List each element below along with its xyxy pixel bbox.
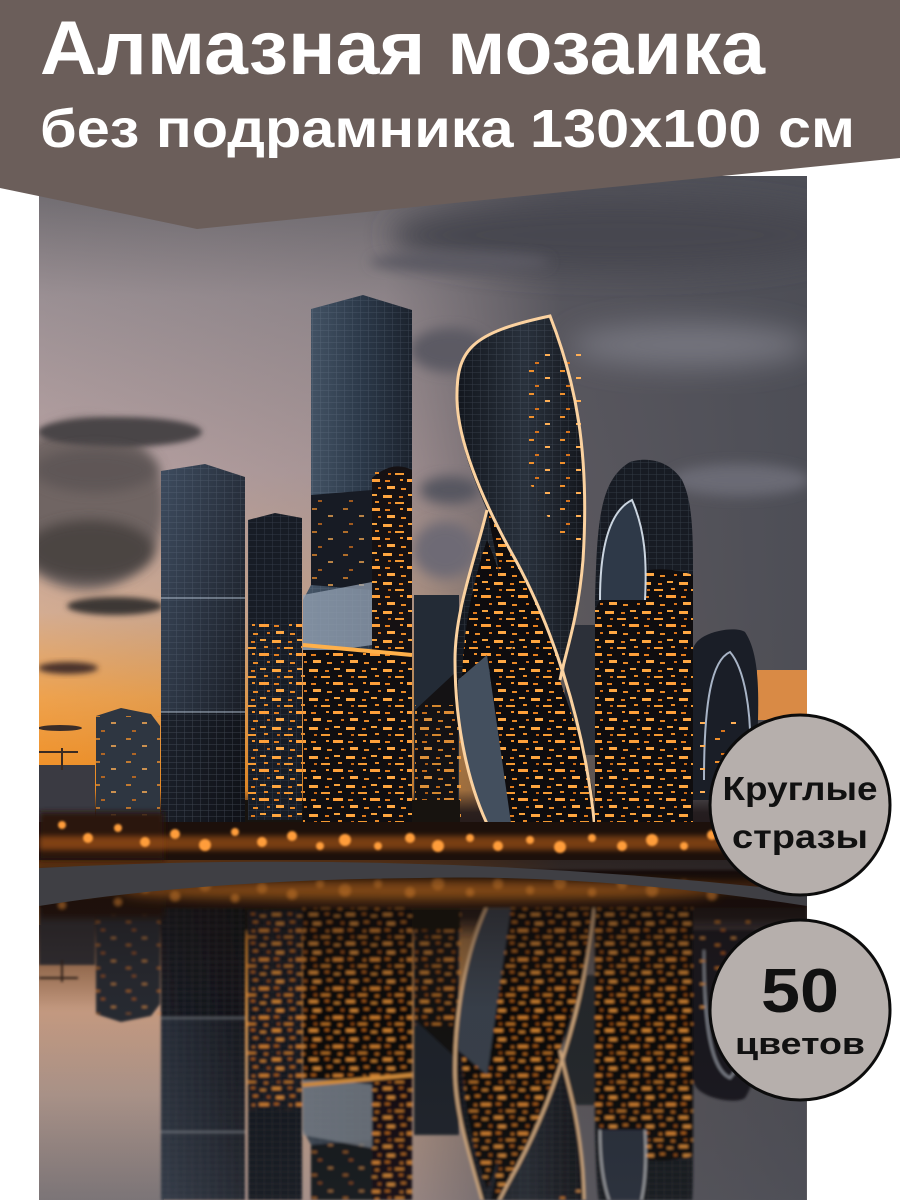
left clouds [39,412,205,731]
badge: 50 colours: 50 [761,957,839,1026]
badge: 50 colours: цветов [735,1026,865,1061]
badge: round rhinestones: Круглые [722,770,878,807]
title: Алмазная мозаика [40,6,766,91]
reflection on water [39,860,807,1200]
badge: round rhinestones [710,715,890,895]
sky [39,176,850,880]
badge: round rhinestones: стразы [732,818,868,855]
badge: 50 colours [710,920,890,1100]
header banner [0,0,900,229]
embankment [39,862,807,906]
skyscrapers and embankment lights [39,295,807,860]
subtitle: без подрамника 130х100 см [40,99,855,159]
